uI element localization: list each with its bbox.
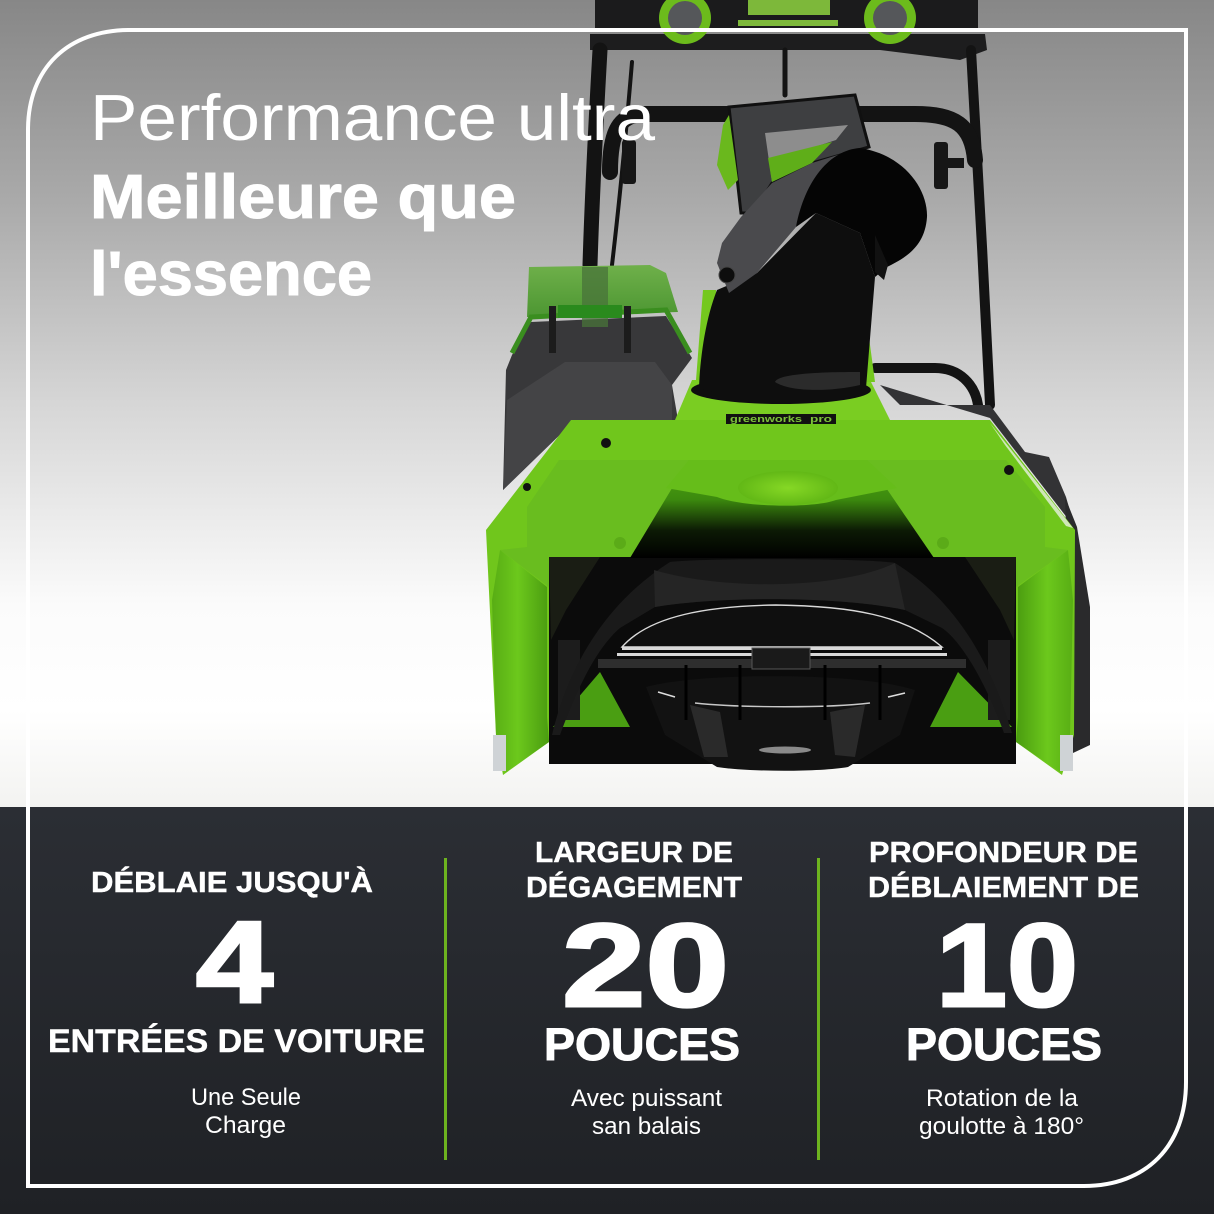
auger cavity [549,460,1016,764]
greenworks badge: pro [810,414,833,424]
column: clearing width: POUCES [544,1019,740,1070]
column: clearing width: 20 [562,900,729,1032]
column: clearing depth: POUCES [906,1019,1102,1070]
title [90,81,656,309]
snow blower product [486,0,1090,775]
title: l'essence [90,240,372,309]
handle knobs [622,140,964,189]
title: Meilleure que [90,163,516,232]
background gradient [0,0,1214,807]
auger [552,559,1012,771]
discharge chute [691,95,927,404]
divider [817,858,820,1160]
column: clearing depth: DÉBLAIEMENT DE [868,870,1139,904]
bottom dark panel [0,807,1214,1214]
column: clearing width: Avec puissant [571,1085,722,1112]
column: car entries: 4 [196,897,273,1027]
column: car entries: ENTRÉES DE VOITURE [48,1023,425,1059]
column: clearing width: DÉGAGEMENT [526,870,742,904]
green hood [486,380,1075,775]
column: car entries: DÉBLAIE JUSQU'À [91,865,373,899]
column: car entries: Charge [205,1112,286,1139]
title: Performance ultra [90,81,656,154]
column: clearing width: LARGEUR DE [535,837,733,869]
handle console [590,0,987,60]
column: clearing width: san balais [592,1113,701,1140]
greenworks badge [726,414,836,424]
column: car entries [48,865,425,1139]
handle frame [590,50,990,405]
column: car entries: Une Seule [191,1084,301,1111]
column: clearing depth [868,837,1139,1140]
column: clearing depth: PROFONDEUR DE [869,837,1138,869]
column: clearing depth: 10 [936,900,1078,1032]
column: clearing depth: Rotation de la [926,1085,1079,1112]
greenworks badge: greenworks [730,414,802,424]
divider [444,858,447,1160]
column: clearing width [526,837,742,1140]
column: clearing depth: goulotte à 180° [919,1113,1084,1140]
battery compartment [503,265,1090,753]
